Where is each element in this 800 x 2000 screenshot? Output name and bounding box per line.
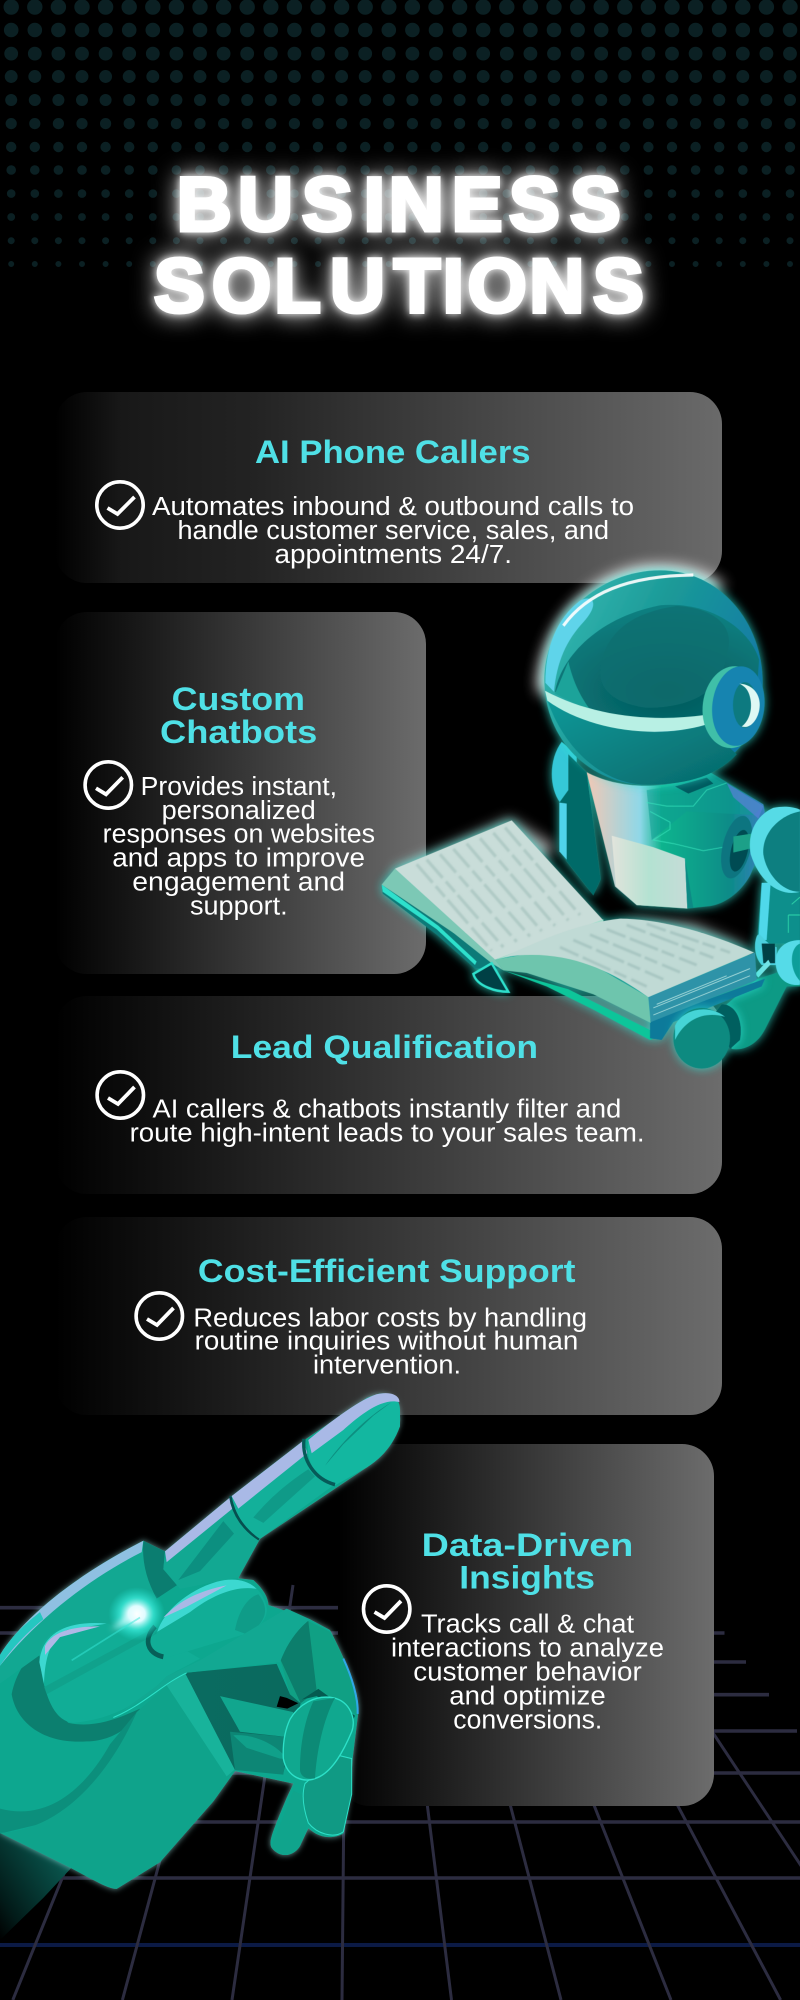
bookmark — [473, 963, 508, 992]
body text: Tracks call & chat — [421, 1611, 634, 1639]
heading: Cost-Efficient Support: Cost-Efficient Support — [198, 1253, 576, 1289]
covers — [382, 885, 500, 969]
right arm — [757, 883, 800, 947]
torso — [587, 772, 765, 909]
heading: Data-Driven Insights — [422, 1527, 633, 1596]
body text — [391, 1611, 664, 1734]
left page — [395, 820, 603, 960]
wheel — [673, 1004, 741, 1069]
body text: and optimize — [449, 1682, 606, 1710]
title: SOLUTIONS — [154, 244, 644, 329]
neck slot — [675, 777, 713, 794]
shoulder joint — [715, 812, 758, 882]
body text: Provides instant, — [141, 773, 337, 801]
page blocks — [382, 869, 503, 970]
panel: Data-Driven Insights — [338, 1444, 714, 1806]
dot pattern — [11, 7, 800, 264]
ear piece — [698, 662, 768, 752]
visor — [555, 605, 759, 720]
panel: AI Phone Callers — [55, 392, 722, 583]
heading: AI Phone Callers: AI Phone Callers — [255, 434, 531, 470]
body text: engagement and — [132, 868, 345, 896]
body text: responses on websites — [103, 820, 375, 848]
body text — [130, 1095, 645, 1148]
title: SOLUTIONS — [154, 244, 644, 329]
icon: check — [136, 1293, 182, 1339]
body text — [193, 1305, 587, 1380]
body text: appointments 24/7. — [274, 541, 512, 569]
head — [544, 570, 769, 785]
body text: route high-intent leads to your sales team. — [130, 1120, 645, 1148]
palm shadow — [12, 1648, 140, 1742]
heading: Data-Driven Insights: Data-Driven — [422, 1527, 633, 1563]
spine — [495, 919, 603, 960]
body text: and apps to improve — [112, 844, 365, 872]
body text: conversions. — [453, 1706, 602, 1734]
body text: intervention. — [313, 1352, 461, 1380]
body text: routine inquiries without human — [195, 1328, 578, 1356]
icon: check — [97, 1072, 144, 1118]
title: BUSINESS — [177, 163, 621, 248]
heading: Custom Chatbots: Custom — [172, 681, 305, 717]
circuit lines — [647, 783, 727, 851]
panel: Cost-Efficient Support — [55, 1217, 722, 1415]
back of hand — [0, 1541, 157, 1684]
wrist — [0, 1832, 72, 1940]
body text: customer behavior — [413, 1658, 642, 1686]
body text: personalized — [162, 797, 316, 825]
knuckle — [143, 1541, 178, 1599]
title: BUSINESS — [177, 163, 621, 248]
index finger middle — [232, 1441, 333, 1539]
body text: AI callers & chatbots instantly filter and — [152, 1095, 621, 1123]
heading: Custom Chatbots: Chatbots — [160, 714, 317, 750]
panel: Custom Chatbots — [55, 612, 426, 974]
body text — [152, 493, 634, 569]
body text: handle customer service, sales, and — [178, 517, 609, 545]
body text: Reduces labor costs by handling — [193, 1305, 587, 1333]
ring finger pad — [283, 1697, 353, 1780]
index finger lower — [163, 1496, 260, 1589]
middle finger — [156, 1579, 267, 1659]
ring finger upper — [280, 1621, 358, 1716]
robot body and arms — [552, 742, 800, 1049]
heading: Lead Qualification: Lead Qualification — [231, 1029, 538, 1065]
body text: Automates inbound & outbound calls to — [152, 493, 634, 521]
pinky — [303, 1755, 352, 1835]
cuff — [0, 1673, 235, 1889]
panel: Lead Qualification — [55, 996, 722, 1194]
body text: interactions to analyze — [391, 1635, 664, 1663]
body text — [103, 773, 375, 920]
grid floor — [0, 1585, 800, 2000]
title — [154, 163, 644, 329]
visor band — [545, 691, 705, 732]
illustration: robot reading a book — [382, 565, 800, 1069]
index fingertip — [308, 1393, 400, 1485]
lens flare — [72, 1587, 165, 1660]
body text: support. — [190, 892, 288, 920]
little finger — [272, 1791, 308, 1855]
back arm — [552, 742, 577, 802]
illustration: robot hand pointing — [0, 1393, 400, 1940]
inner fingers dark — [185, 1664, 301, 1773]
knuckle dome — [39, 1623, 200, 1723]
right page — [503, 919, 754, 997]
title: SOLUTIONS — [154, 244, 644, 329]
white halo around head and book — [390, 565, 753, 954]
hand silhouette — [0, 1394, 400, 1889]
heading: Data-Driven Insights: Insights — [459, 1560, 595, 1596]
heading: Custom Chatbots — [160, 681, 317, 750]
lower bowl — [546, 695, 737, 785]
helmet highlight — [545, 598, 593, 692]
icon: check — [97, 482, 143, 528]
chest panel — [612, 836, 687, 909]
book — [382, 820, 765, 1040]
icon: check — [85, 762, 132, 808]
icon: check — [364, 1586, 410, 1632]
title: BUSINESS — [177, 163, 621, 248]
